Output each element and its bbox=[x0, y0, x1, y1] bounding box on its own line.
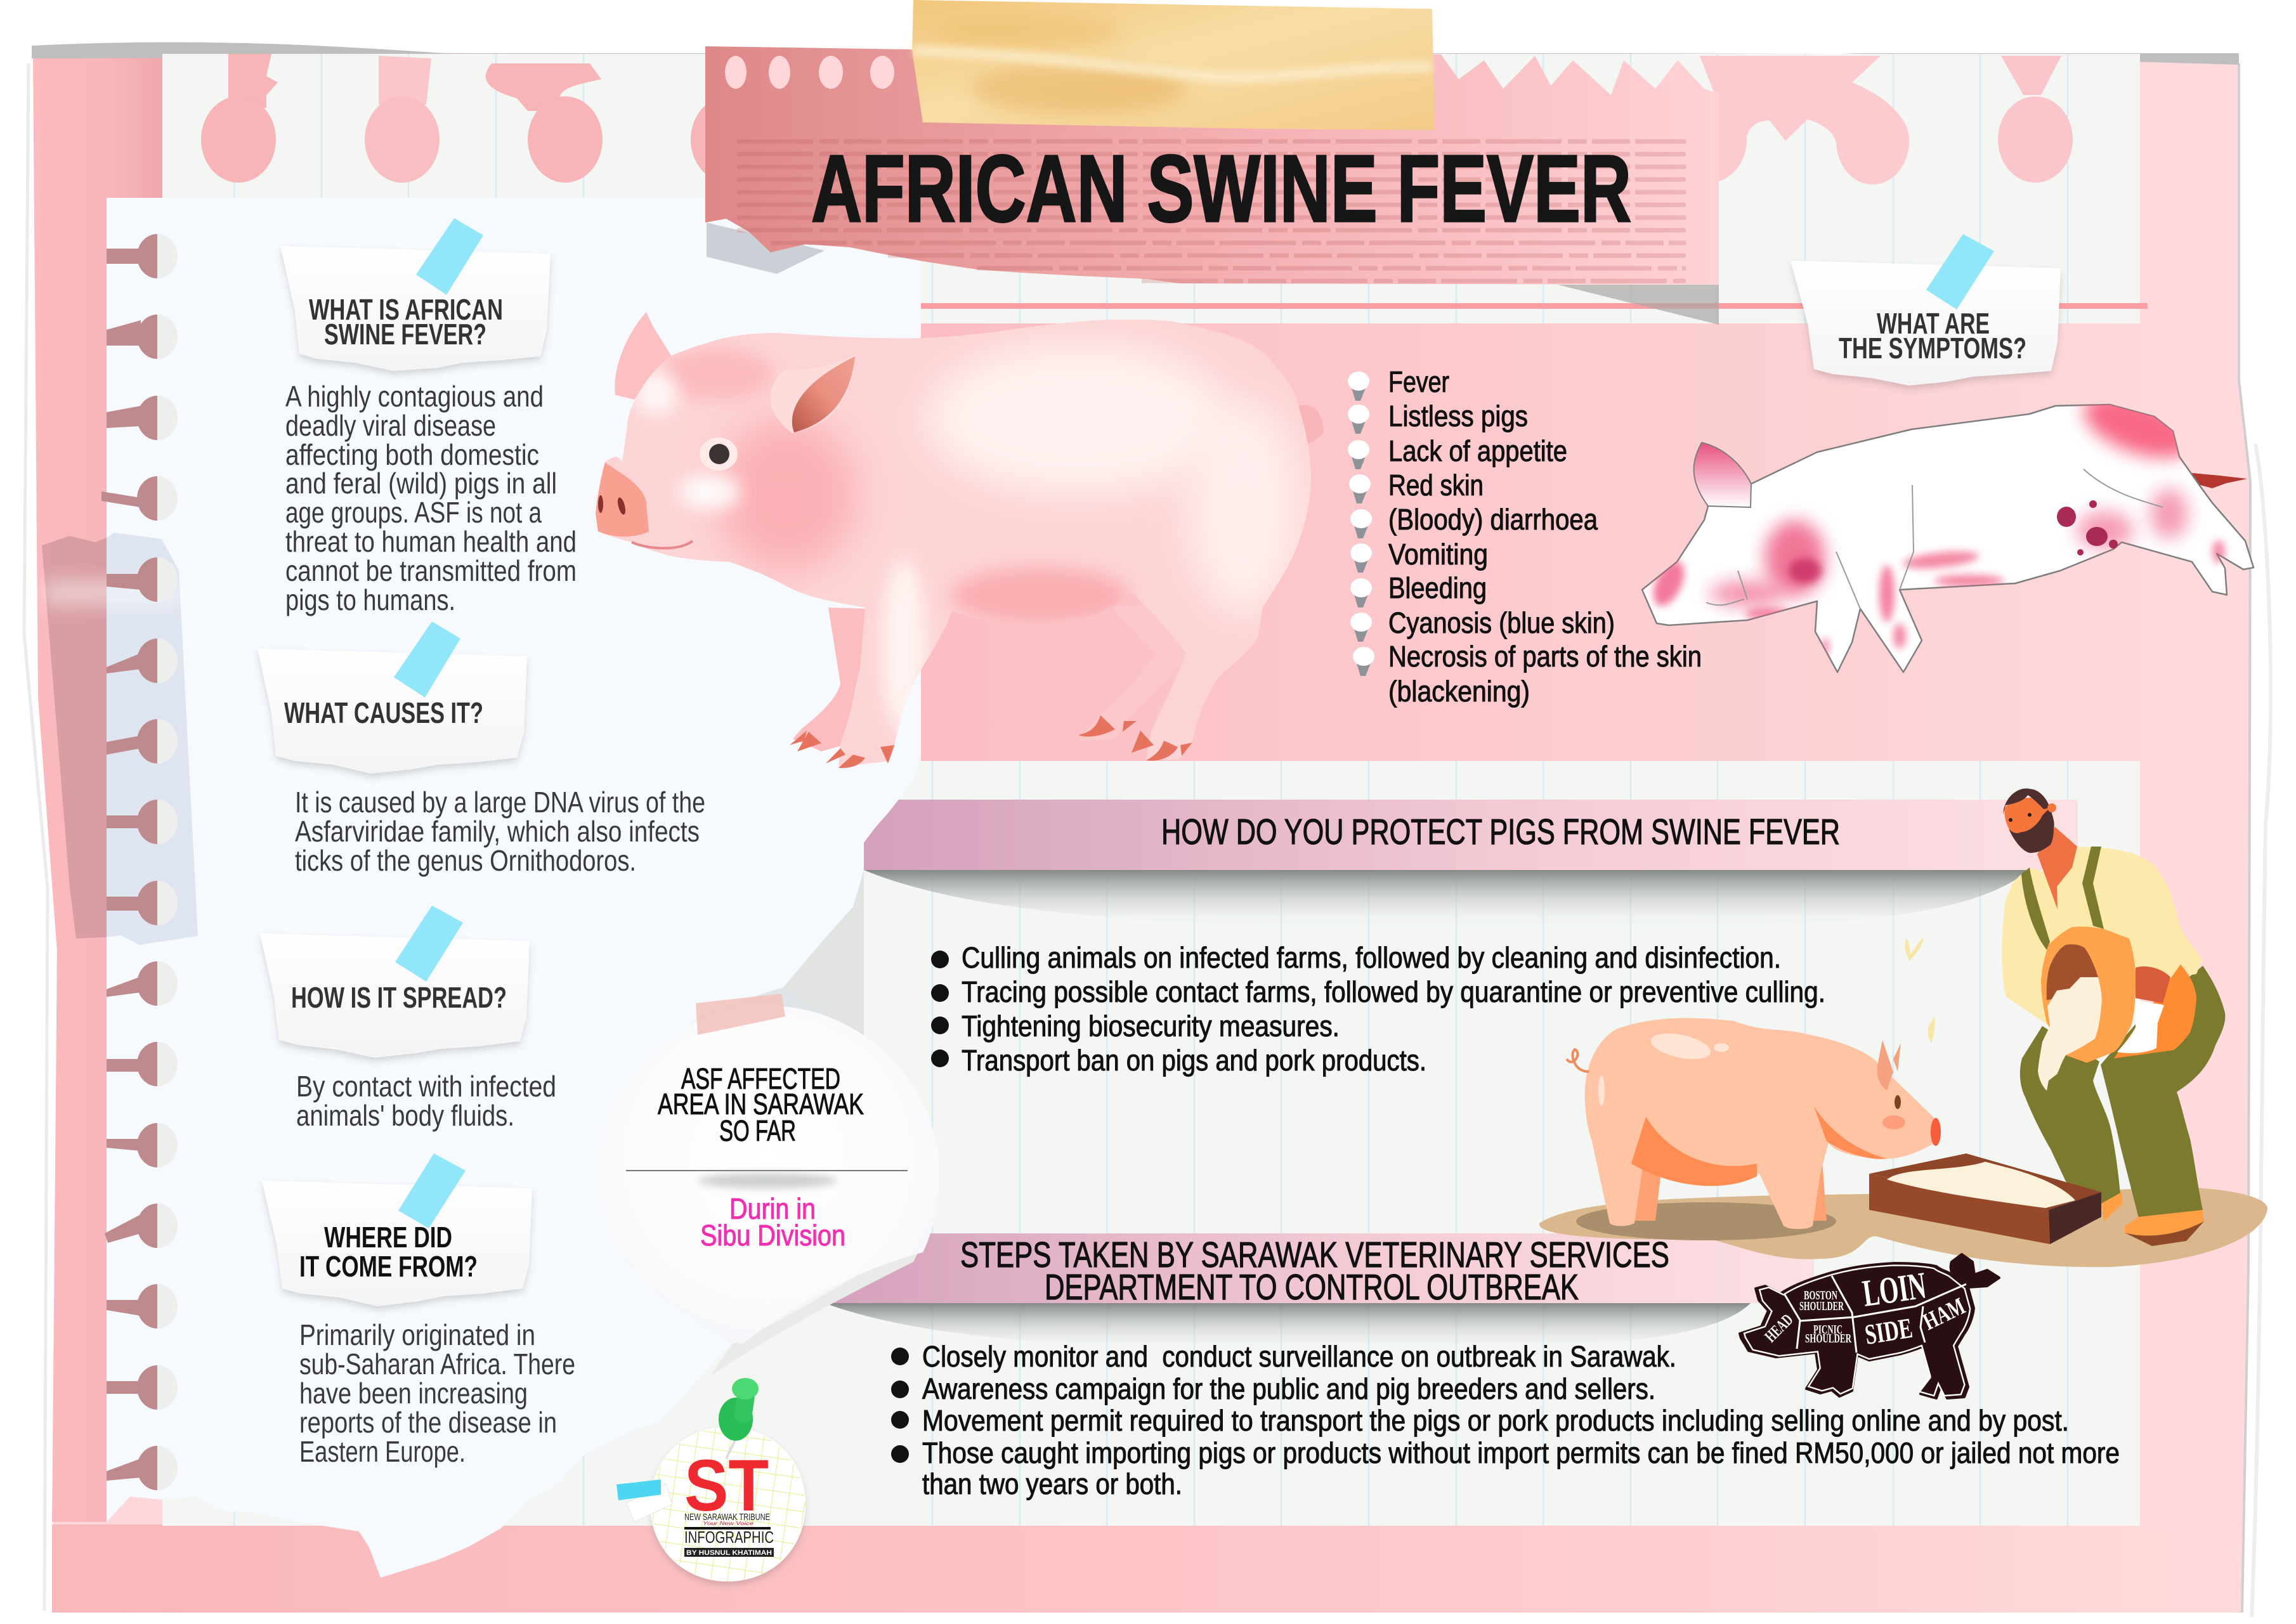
logo letters: ST bbox=[684, 1445, 769, 1526]
logo publication: NEW SARAWAK TRIBUNE bbox=[684, 1512, 770, 1523]
back leg bbox=[2020, 1026, 2120, 1204]
text: what is African swine fever: and feral (wild) pigs in all bbox=[285, 467, 557, 500]
chart label: picnic: PICNIC bbox=[1813, 1323, 1843, 1337]
text: what is African swine fever: deadly viral disease bbox=[285, 409, 496, 442]
band texture lines bbox=[737, 141, 1686, 281]
sleeve bbox=[2136, 966, 2170, 1003]
suspender left bbox=[2021, 867, 2050, 950]
tail bbox=[1259, 405, 1324, 507]
text: where did it come from: sub-Saharan Africa. There bbox=[299, 1348, 575, 1380]
tape bbox=[1926, 234, 1994, 309]
text: what causes it: ticks of the genus Ornithodoros. bbox=[295, 844, 636, 877]
heading: steps taken second line: DEPARTMENT TO CONTROL OUTBREAK bbox=[1045, 1267, 1579, 1308]
callout heading: ASF AFFECTED bbox=[681, 1062, 840, 1095]
list: symptoms: (blackening) bbox=[1388, 675, 1530, 708]
panel: symptoms pink band bbox=[921, 323, 2140, 761]
farmer bbox=[2002, 788, 2225, 1246]
location line 2: Sibu Division bbox=[700, 1219, 845, 1252]
chart label: boston: BOSTON bbox=[1804, 1289, 1837, 1302]
list: protection measures: Transport ban on pigs and pork products. bbox=[962, 1044, 1426, 1077]
heading: how do you protect: HOW DO YOU PROTECT PIGS FROM SWINE FEVER bbox=[1161, 812, 1840, 852]
list: symptoms: Listless pigs bbox=[1388, 400, 1528, 432]
list: symptoms: (Bloody) diarrhoea bbox=[1388, 503, 1598, 536]
suspender right bbox=[2082, 847, 2104, 929]
card: where did it come from bbox=[262, 1153, 532, 1306]
text: what causes it bbox=[295, 786, 705, 877]
list: symptoms: Necrosis of parts of the skin bbox=[1388, 640, 1702, 673]
logo: ST infographic badge bbox=[616, 1378, 806, 1582]
front leg bbox=[2101, 966, 2225, 1218]
hip patch bbox=[2114, 965, 2196, 1058]
chart label: shoulder lower: SHOULDER bbox=[1805, 1332, 1851, 1346]
pupil bbox=[709, 444, 729, 464]
card: what is African swine fever bbox=[280, 218, 551, 371]
list: symptoms: Fever bbox=[1388, 365, 1449, 398]
heading: WHAT CAUSES IT? bbox=[284, 696, 483, 729]
card: how is it spread bbox=[260, 906, 530, 1058]
butterfly small bbox=[1928, 1016, 1935, 1043]
inner ear bbox=[792, 356, 855, 432]
shirt bbox=[2002, 847, 2202, 1024]
list: steps taken bbox=[891, 1340, 2120, 1500]
body bbox=[1642, 405, 2254, 672]
chart label: shoulder: SHOULDER bbox=[1799, 1299, 1844, 1313]
binder holes along the top bbox=[201, 54, 2073, 185]
far rear leg bbox=[1078, 602, 1185, 741]
title band bbox=[705, 46, 1719, 325]
ear bbox=[1694, 443, 1751, 507]
list: symptoms: Lack of appetite bbox=[1388, 434, 1567, 467]
left translucent tape bbox=[42, 533, 198, 945]
text: where did it come from: have been increasing bbox=[299, 1377, 528, 1410]
tape bbox=[416, 218, 483, 295]
logo credit: BY HUSNUL KHATIMAH bbox=[686, 1549, 772, 1557]
callout heading line 2: AREA IN SARAWAK bbox=[658, 1088, 864, 1121]
ear back bbox=[615, 312, 671, 400]
body contours bbox=[1706, 469, 2163, 609]
lesions bbox=[2057, 500, 2118, 555]
list: steps taken: Movement permit required to transport the pigs or pork products including selling online and by post. bbox=[922, 1404, 2069, 1437]
text: what causes it: Asfarviridae family, which also infects bbox=[295, 815, 700, 848]
back shoe bbox=[2101, 1192, 2123, 1221]
callout heading line 3: SO FAR bbox=[719, 1114, 796, 1147]
heading line 2: IT COME FROM? bbox=[299, 1250, 478, 1283]
list: symptoms: Vomiting bbox=[1388, 538, 1488, 571]
panel: ruled inner paper bbox=[162, 54, 2140, 1526]
top grey paper edge bbox=[32, 42, 2239, 65]
list: symptoms: Red skin bbox=[1388, 469, 1484, 502]
location: Durin in bbox=[729, 1192, 816, 1225]
white tape bbox=[627, 1484, 672, 1522]
band right shadow bbox=[1558, 285, 1719, 325]
band punched holes bbox=[725, 56, 894, 89]
heading: WHAT ARE bbox=[1877, 307, 1990, 340]
text: what is African swine fever: cannot be transmitted from bbox=[285, 554, 577, 587]
far front leg bbox=[793, 607, 869, 751]
card: what are the symptoms bbox=[1790, 234, 2061, 386]
list: protection measures: Tightening biosecurity measures. bbox=[962, 1010, 1340, 1043]
text: how is it spread: animals' body fluids. bbox=[296, 1099, 514, 1132]
panel: protect heading band bbox=[850, 800, 2078, 929]
mouth bbox=[632, 541, 693, 549]
green push pin bbox=[719, 1378, 759, 1458]
tape bbox=[395, 906, 463, 982]
text: how is it spread bbox=[296, 1070, 556, 1132]
pig shadow bbox=[1576, 1202, 1836, 1240]
list: protection measures: Culling animals on infected farms, followed by cleaning and disinfection. bbox=[962, 941, 1781, 974]
list: steps taken: Those caught importing pigs or products without import permits can be fined RM50,000 or jailed not more bbox=[922, 1436, 2120, 1469]
heading: WHERE DID bbox=[324, 1221, 452, 1254]
heading: steps taken: STEPS TAKEN BY SARAWAK VETERINARY SERVICES bbox=[960, 1235, 1669, 1275]
logo infographic: INFOGRAPHIC bbox=[684, 1528, 774, 1547]
blue tape bbox=[616, 1479, 661, 1500]
list: steps taken: Awareness campaign for the public and pig breeders and sellers. bbox=[922, 1372, 1655, 1405]
divider bbox=[626, 1170, 908, 1171]
text: where did it come from bbox=[299, 1318, 575, 1468]
callout: affected area bubble bbox=[597, 994, 939, 1376]
heading: HOW IS IT SPREAD? bbox=[291, 981, 507, 1014]
eye bbox=[700, 438, 738, 471]
floor shadow bbox=[1539, 1187, 2267, 1267]
glove bbox=[2117, 1000, 2164, 1053]
heading line 2: THE SYMPTOMS? bbox=[1839, 332, 2026, 365]
chart label: ham: HAM bbox=[1919, 1293, 1969, 1335]
text: what causes it: It is caused by a large DNA virus of the bbox=[295, 786, 705, 819]
feeding trough bbox=[1869, 1153, 2101, 1244]
hooves bbox=[790, 715, 1192, 768]
front shoe bbox=[2125, 1210, 2204, 1246]
logo rule bbox=[684, 1527, 771, 1530]
panel: steps heading band bbox=[812, 1233, 1814, 1351]
binder rings along the left bbox=[101, 234, 178, 1490]
list: protection measures bbox=[931, 941, 1825, 1077]
ear bbox=[770, 354, 855, 433]
list: steps taken: Closely monitor and conduct surveillance on outbreak in Sarawak. bbox=[922, 1340, 1676, 1373]
nostril bbox=[616, 497, 627, 516]
card: what causes it bbox=[258, 621, 527, 774]
text: what is African swine fever: threat to human health and bbox=[285, 525, 577, 558]
text: what is African swine fever: A highly contagious and bbox=[285, 380, 544, 413]
text: where did it come from: reports of the disease in bbox=[299, 1406, 557, 1439]
paper curl shadow bbox=[783, 850, 864, 1040]
heading line 2: SWINE FEVER? bbox=[324, 318, 486, 351]
text: what is African swine fever bbox=[285, 380, 577, 616]
blotches bbox=[1647, 382, 2225, 656]
decorative red rule bbox=[921, 303, 2148, 309]
pig chart dividers bbox=[1784, 1276, 1966, 1353]
text: how is it spread: By contact with infected bbox=[296, 1070, 556, 1103]
title: AFRICAN SWINE FEVER bbox=[811, 135, 1631, 242]
cartoon pig bbox=[1567, 1018, 1941, 1229]
tape bbox=[394, 621, 460, 698]
logo tagline: Your New Voice bbox=[703, 1521, 754, 1526]
illustration: pink pig bbox=[596, 312, 1324, 768]
list: steps taken: than two years or both. bbox=[922, 1467, 1182, 1500]
body bbox=[596, 320, 1311, 767]
panel: torn notes paper bbox=[107, 198, 921, 1578]
fur shading bbox=[635, 342, 1300, 736]
text: what is African swine fever: affecting both domestic bbox=[285, 438, 539, 471]
heading: WHAT IS AFRICAN bbox=[309, 293, 503, 326]
list: protection measures: Tracing possible contact farms, followed by quarantine or preventive culling. bbox=[962, 975, 1825, 1008]
text: where did it come from: Primarily originated in bbox=[299, 1318, 535, 1351]
list: symptoms bbox=[1348, 365, 1702, 708]
neck bbox=[2037, 827, 2077, 909]
illustration: sick pig bbox=[1642, 382, 2254, 672]
pig chart outline bbox=[1744, 1265, 1970, 1396]
tape bbox=[398, 1153, 466, 1228]
butterfly bbox=[1905, 937, 1924, 961]
band shadow on paper bbox=[707, 223, 825, 274]
list: symptoms: Cyanosis (blue skin) bbox=[1388, 606, 1615, 639]
text: what is African swine fever: pigs to humans. bbox=[285, 583, 455, 616]
pin bullets bbox=[1348, 372, 1374, 676]
bucket bbox=[2041, 926, 2136, 1063]
icon: butcher pig chart bbox=[1740, 1254, 1999, 1398]
illustration: farmer feeding pig bbox=[1539, 788, 2267, 1267]
curl bbox=[710, 1237, 926, 1376]
head bbox=[2003, 788, 2056, 853]
nostrils bbox=[598, 495, 603, 513]
translucent tape behind bubble bbox=[723, 870, 864, 1040]
chart label: side: SIDE bbox=[1863, 1312, 1915, 1351]
milk pouring bbox=[2038, 977, 2102, 1091]
list: symptoms: Bleeding bbox=[1388, 571, 1487, 604]
masking tape bbox=[912, 0, 1435, 130]
chart label: loin: LOIN bbox=[1860, 1264, 1929, 1315]
divider shadow bbox=[698, 1173, 837, 1188]
bucket inside bbox=[2047, 944, 2098, 1000]
snout bbox=[596, 462, 649, 536]
text: what is African swine fever: age groups. ASF is not a bbox=[285, 496, 542, 529]
pink tape bbox=[696, 994, 785, 1035]
sick pig tail bbox=[2186, 472, 2247, 488]
text: where did it come from: Eastern Europe. bbox=[299, 1435, 466, 1468]
chart label: head: HEAD bbox=[1761, 1310, 1797, 1346]
